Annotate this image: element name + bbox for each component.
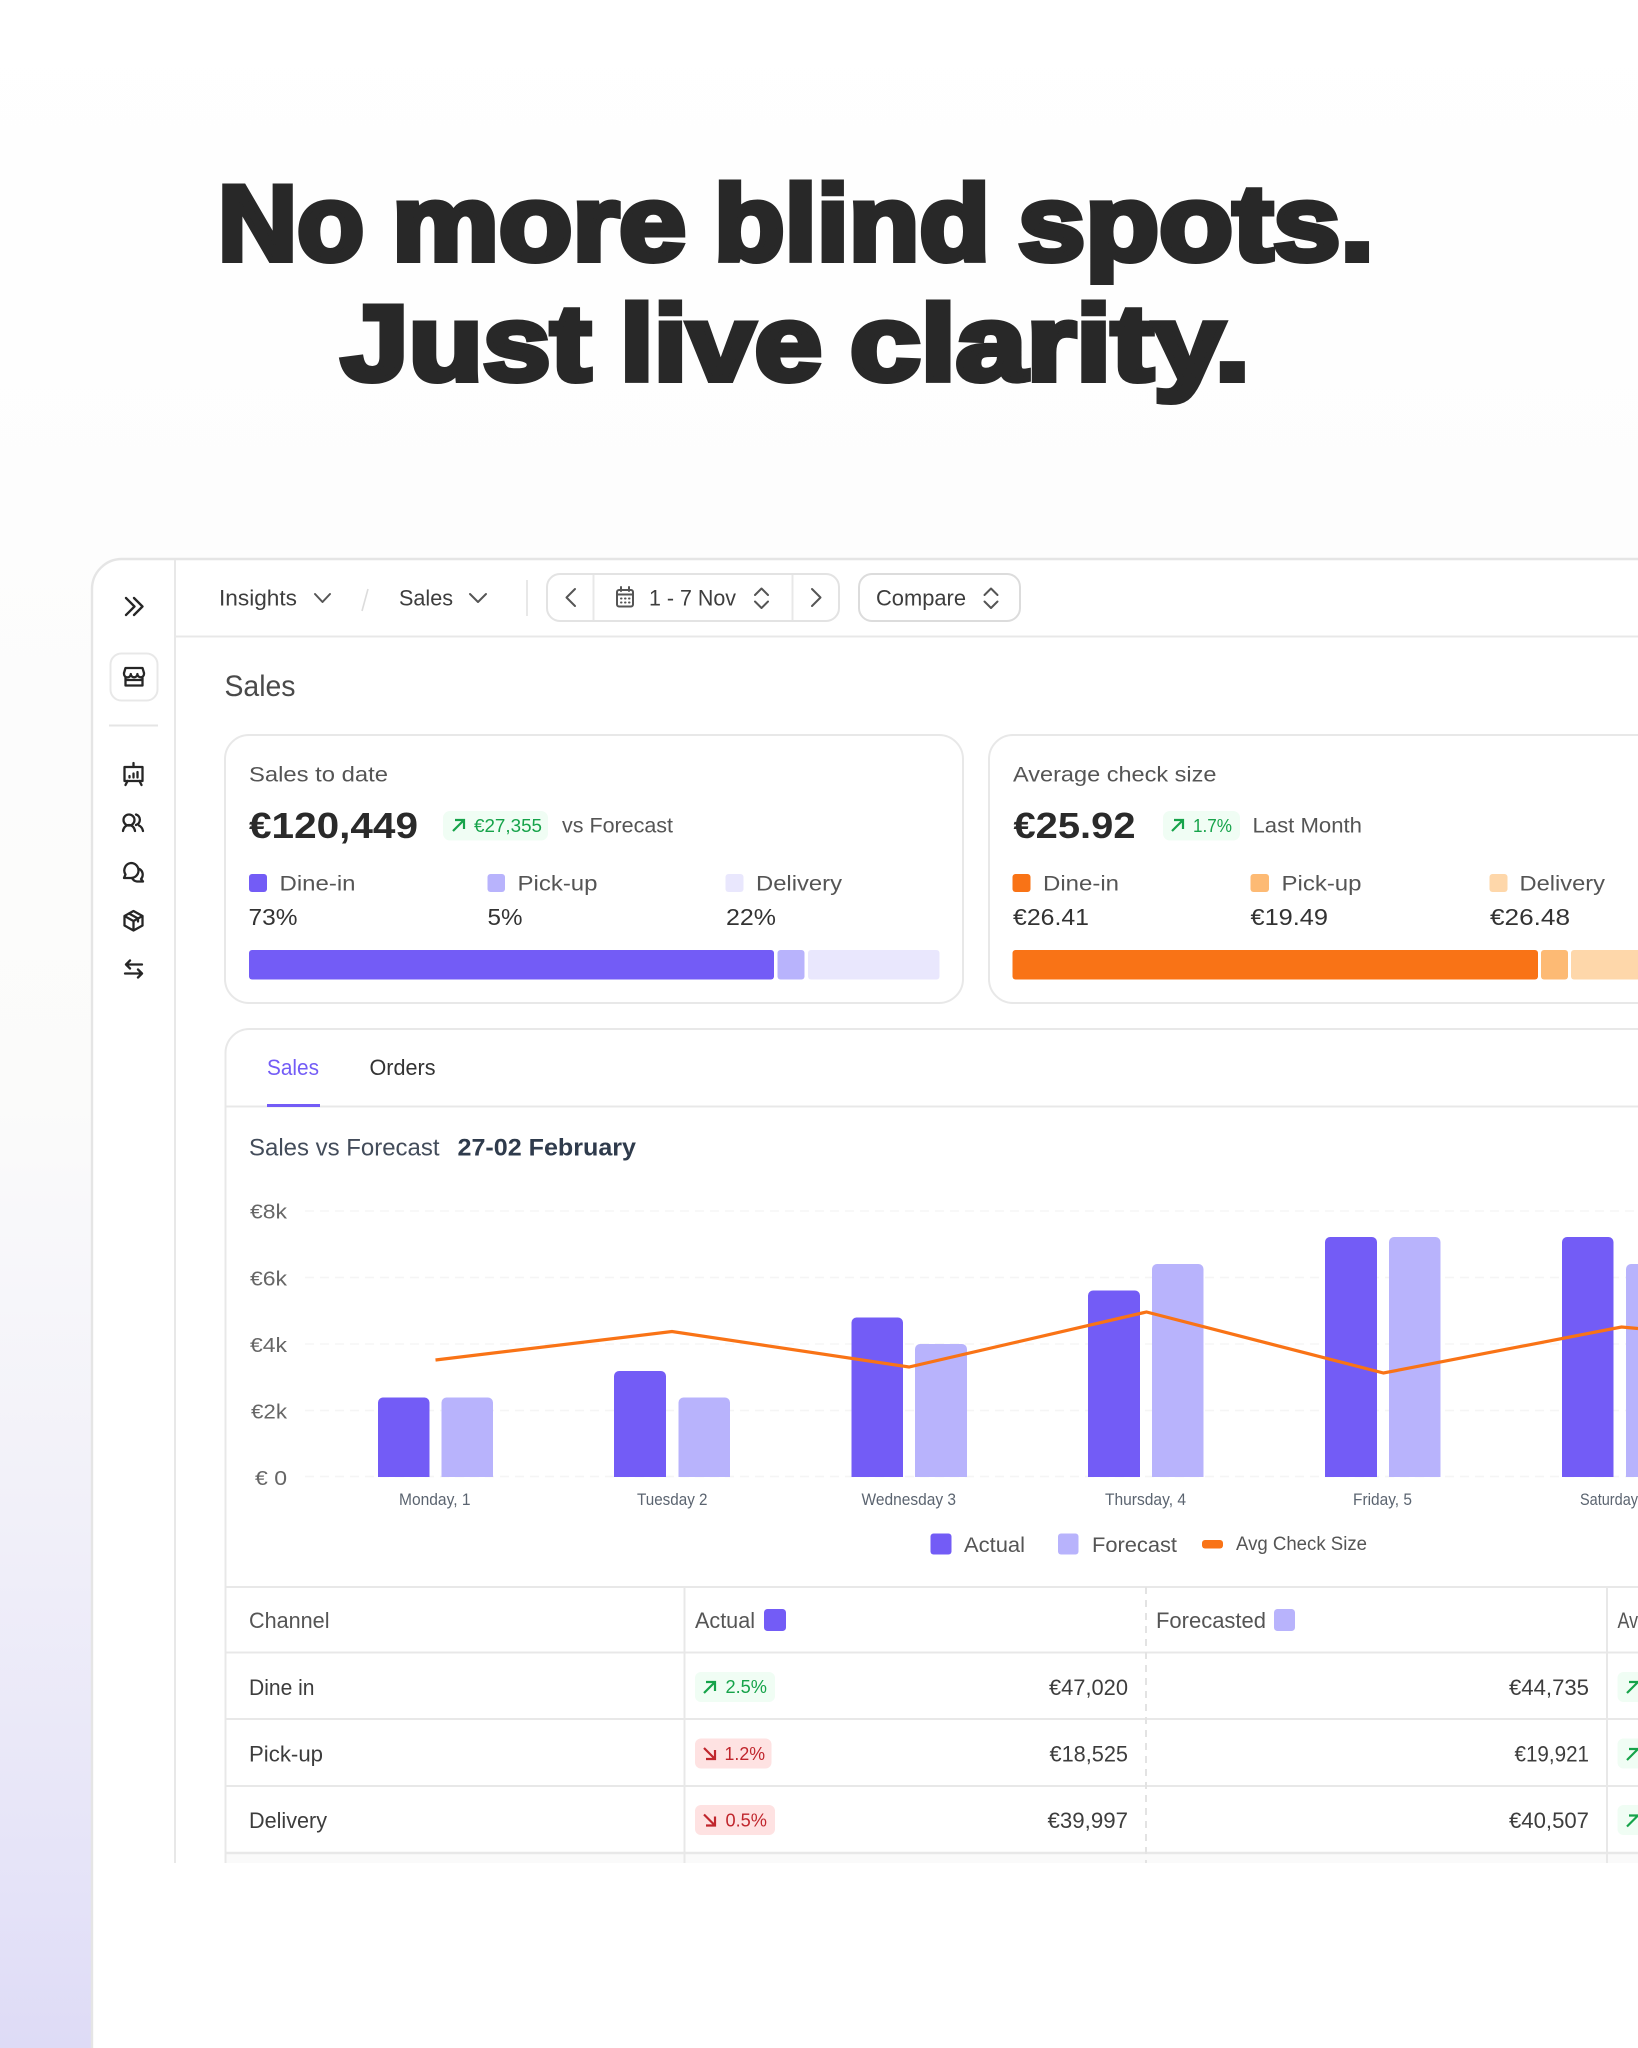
legend: delivery — [726, 872, 843, 930]
icon: store button — [110, 654, 158, 700]
title: more — [392, 163, 686, 283]
table row: pick-up: €19,921 — [1514, 1742, 1589, 1766]
bars — [378, 1237, 1638, 1501]
panel: average check size: Average check size — [1013, 764, 1216, 786]
panel: sales to date: Sales to date — [249, 764, 388, 786]
table row: dine in: €47,020 — [1049, 1675, 1128, 1700]
icon: chat bubbles — [124, 863, 143, 882]
table header: Channel — [249, 1608, 330, 1633]
title: Just — [341, 283, 591, 403]
toolbar — [176, 574, 1638, 636]
legend: delivery: Delivery — [1520, 872, 1606, 896]
panel: average check size: Last Month — [1252, 814, 1362, 838]
icon: people — [123, 814, 143, 831]
title: clarity. — [850, 283, 1250, 403]
breadcrumb: insights: Insights — [219, 586, 297, 610]
title — [218, 163, 1374, 403]
legend: delivery: 22% — [726, 904, 776, 930]
table row: delivery: Delivery — [249, 1808, 327, 1833]
y axis: €2k — [251, 1402, 288, 1424]
table row: pick-up: €18,525 — [1050, 1742, 1128, 1766]
chart legend — [930, 1534, 1367, 1557]
table row: pick-up: 1.2% — [724, 1743, 765, 1764]
panel: sales to date — [225, 735, 963, 1003]
table: channels — [226, 1587, 1638, 1863]
legend: pick-up: Pick-up — [518, 872, 598, 896]
tabs — [226, 1055, 1638, 1107]
legend: dine-in: 73% — [248, 904, 298, 930]
legend: dine-in: Dine-in — [280, 872, 356, 896]
badge: last month — [1163, 811, 1240, 840]
y axis: € 0 — [255, 1468, 287, 1490]
title: live — [620, 283, 822, 403]
bar chart: sales vs forecast — [250, 1202, 1638, 1509]
legend: pick-up: 5% — [488, 904, 523, 930]
tabs: Sales — [267, 1055, 319, 1080]
stacked bar: channel share — [249, 950, 940, 980]
y axis: €6k — [250, 1268, 288, 1290]
legend: dine-in: €26.41 — [1013, 904, 1089, 930]
legend: pick-up: Pick-up — [1282, 872, 1362, 896]
breadcrumb: sales — [399, 586, 486, 610]
legend: pick-up — [1250, 872, 1362, 930]
legend: dine-in: Dine-in — [1043, 872, 1119, 896]
breadcrumb: sales: Sales — [399, 586, 453, 610]
title: spots. — [1018, 163, 1374, 283]
table row: dine in — [249, 1672, 1638, 1702]
title: No — [218, 163, 364, 283]
title: blind — [714, 163, 990, 283]
chart legend: Actual — [964, 1534, 1025, 1557]
panel: sales vs forecast — [226, 1029, 1638, 1863]
badge: vs forecast — [443, 811, 548, 840]
breadcrumb: insights — [219, 586, 330, 610]
table row: dine in: 2.5% — [726, 1676, 767, 1697]
chart legend: Avg Check Size — [1236, 1534, 1367, 1555]
legend: delivery — [1490, 872, 1606, 930]
x axis labels: Tuesday 2 — [637, 1491, 708, 1509]
table header: Forecasted — [1156, 1608, 1266, 1633]
y axis: €8k — [250, 1202, 288, 1224]
table row: delivery — [249, 1805, 1638, 1835]
icon: presentation chart — [124, 763, 142, 785]
panel: average check size — [989, 735, 1638, 1003]
x axis labels: Thursday, 4 — [1105, 1491, 1186, 1509]
icon: swap arrows — [125, 960, 142, 978]
sidebar — [109, 560, 175, 1863]
x axis labels: Friday, 5 — [1353, 1491, 1412, 1509]
line: avg check size — [436, 1312, 1638, 1373]
legend: dine-in — [1012, 872, 1119, 930]
badge: last month: 1.7% — [1193, 815, 1232, 836]
chart legend: Forecast — [1092, 1534, 1177, 1557]
date picker: 1 - 7 Nov — [649, 586, 736, 610]
chart title: Sales vs Forecast — [249, 1134, 440, 1162]
panel: sales to date: vs Forecast — [562, 814, 673, 838]
compare button — [859, 574, 1020, 621]
table row: pick-up — [249, 1738, 1638, 1768]
x axis labels: Monday, 1 — [399, 1491, 470, 1509]
stacked bar: check size — [1012, 950, 1638, 980]
table row: dine in: Dine in — [249, 1675, 314, 1700]
icon: calendar — [617, 587, 633, 606]
x axis labels: Wednesday 3 — [862, 1491, 956, 1509]
y axis: €4k — [250, 1335, 288, 1357]
legend: delivery: €26.48 — [1490, 904, 1570, 930]
table row: dine in: €44,735 — [1509, 1675, 1589, 1700]
tabs: Orders — [370, 1055, 436, 1080]
x axis labels — [399, 1491, 1638, 1509]
heading: sales: Sales — [224, 670, 296, 703]
table header — [249, 1608, 1638, 1633]
legend: delivery: Delivery — [756, 872, 843, 896]
table row: delivery: €39,997 — [1048, 1808, 1128, 1833]
compare button: Compare — [876, 586, 966, 610]
y axis — [250, 1202, 1638, 1490]
icon: expand chevrons — [126, 598, 142, 615]
chart title: 27-02 February — [458, 1134, 637, 1162]
badge: vs forecast: €27,355 — [474, 815, 542, 836]
panel: app window — [92, 559, 1638, 2048]
panel: sales to date: €120,449 — [249, 805, 418, 846]
chart title — [249, 1134, 637, 1162]
table row: delivery: €40,507 — [1509, 1808, 1589, 1833]
legend: dine-in — [248, 872, 356, 930]
table row: delivery: 0.5% — [726, 1810, 767, 1830]
table header: Actual — [695, 1608, 755, 1633]
legend: pick-up — [488, 872, 598, 930]
table row: pick-up: Pick-up — [249, 1742, 323, 1766]
panel: average check size: €25.92 — [1014, 805, 1136, 846]
icon: package box — [124, 911, 142, 930]
date picker — [547, 574, 839, 621]
legend: pick-up: €19.49 — [1250, 904, 1328, 930]
